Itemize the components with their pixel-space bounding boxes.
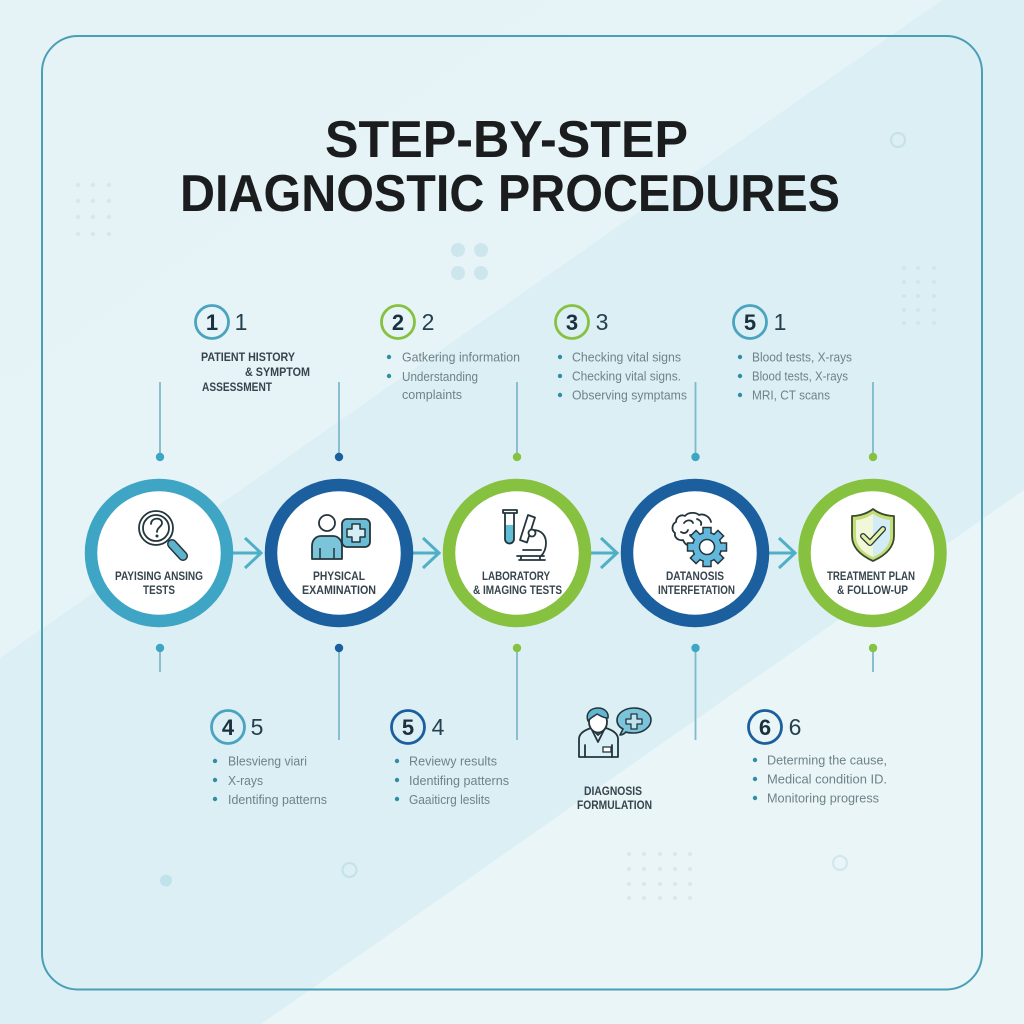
step label	[302, 571, 376, 597]
step circle 5: treatment plan	[804, 485, 940, 621]
top connector lines and dots	[156, 382, 877, 461]
block: step 2 gathering information	[382, 306, 520, 402]
block: step 6 determining the cause: Determing the cause,	[767, 752, 887, 768]
icon: doctor with speech bubble	[579, 708, 651, 757]
step label	[115, 571, 203, 597]
block: step 4 reviewing: Blesvieng viari	[228, 754, 307, 768]
block: step 6 determining the cause: 6	[759, 715, 771, 740]
block: step 1 patient history: 1	[235, 309, 247, 335]
block: step 5 blood tests: Blood tests, X-rays	[752, 368, 848, 384]
arrow 1	[233, 538, 261, 568]
icon: brain and gear	[672, 513, 726, 566]
title: STEP-BY-STEP	[325, 111, 688, 169]
step circle 3: laboratory and imaging	[449, 485, 585, 621]
block: step 1 patient history: 1	[206, 310, 218, 335]
block: step 3 vital signs: 3	[566, 310, 578, 335]
step label	[658, 571, 735, 597]
block: step 5 review results: Identifing patterns	[409, 773, 509, 788]
block: step 5 review results: Gaaiticrg leslits	[409, 792, 490, 807]
icon: shield with check	[852, 509, 894, 561]
block: step 2 gathering information: complaints	[402, 387, 462, 402]
block: step 3 vital signs: Observing symptams	[572, 388, 687, 402]
step label: INTERFETATION	[658, 585, 735, 597]
block: step 4 reviewing	[212, 710, 327, 807]
step label: & IMAGING TESTS	[473, 585, 562, 597]
title: DIAGNOSTIC PROCEDURES	[180, 165, 840, 223]
arrow 4	[768, 538, 795, 568]
arrow 2	[412, 538, 439, 568]
block: step 6 determining the cause: Medical condition ID.	[767, 772, 887, 786]
block: step 1 patient history: PATIENT HISTORY	[201, 352, 295, 364]
step label	[473, 571, 562, 597]
block: step 6 determining the cause: Monitoring progress	[767, 790, 879, 806]
block: step 5 blood tests: MRI, CT scans	[752, 388, 830, 402]
step label: EXAMINATION	[302, 585, 376, 597]
block: step 1 patient history: & SYMPTOM	[245, 367, 310, 379]
step label: TESTS	[143, 585, 175, 597]
label: DIAGNOSIS	[584, 786, 642, 798]
block: step 5 blood tests: 1	[774, 309, 786, 335]
step label: DATANOSIS	[666, 571, 724, 583]
block: step 6 determining the cause	[748, 710, 887, 806]
step label: PHYSICAL	[313, 571, 365, 583]
step label: & FOLLOW-UP	[837, 585, 908, 597]
block: step 4 reviewing: Identifing patterns	[228, 792, 327, 807]
block: step 2 gathering information: 2	[422, 309, 434, 335]
step label: PAYISING ANSING	[115, 571, 203, 583]
step label: LABORATORY	[482, 571, 550, 583]
block: step 5 review results	[392, 710, 509, 807]
block: step 4 reviewing: X-rays	[228, 773, 263, 788]
decorative dot grids and rings	[76, 133, 936, 900]
block: step 4 reviewing: 5	[251, 714, 263, 740]
block: step 5 blood tests: 5	[744, 310, 756, 335]
block: step 1 patient history	[196, 306, 310, 394]
block: step 5 review results: 5	[402, 715, 414, 740]
step label: TREATMENT PLAN	[827, 571, 915, 583]
step label	[827, 571, 915, 597]
block: step 3 vital signs: 3	[596, 309, 608, 335]
block: step 2 gathering information: 2	[392, 310, 404, 335]
block: step 5 blood tests: Blood tests, X-rays	[752, 350, 852, 364]
block: step 3 vital signs	[556, 306, 687, 402]
block: step 4 reviewing: 4	[222, 715, 235, 740]
block: step 1 patient history: ASSESSMENT	[202, 382, 272, 394]
step circle 4: data interpretation	[627, 485, 763, 621]
label	[577, 786, 652, 812]
block: step 5 review results: Reviewy results	[409, 754, 497, 768]
arrow 3	[590, 538, 617, 568]
block: step 2 gathering information: Understanding	[402, 369, 478, 384]
icon: person and medical cross	[312, 515, 370, 559]
icon: test tube and microscope	[503, 510, 546, 560]
title	[180, 111, 840, 223]
block: diagnosis formulation	[577, 708, 652, 812]
block: step 5 review results: 4	[432, 714, 445, 740]
block: step 3 vital signs: Checking vital signs.	[572, 368, 681, 384]
step circle 2: physical examination	[271, 485, 407, 621]
block: step 3 vital signs: Checking vital signs	[572, 350, 681, 364]
step circle 1: tests	[91, 485, 227, 621]
block: step 2 gathering information: Gatkering information	[402, 350, 520, 364]
block: step 5 blood tests	[734, 306, 852, 402]
block: step 6 determining the cause: 6	[789, 714, 801, 740]
icon: magnifier with question mark	[139, 511, 183, 556]
label: FORMULATION	[577, 800, 652, 812]
bottom connector lines and dots	[156, 644, 877, 740]
